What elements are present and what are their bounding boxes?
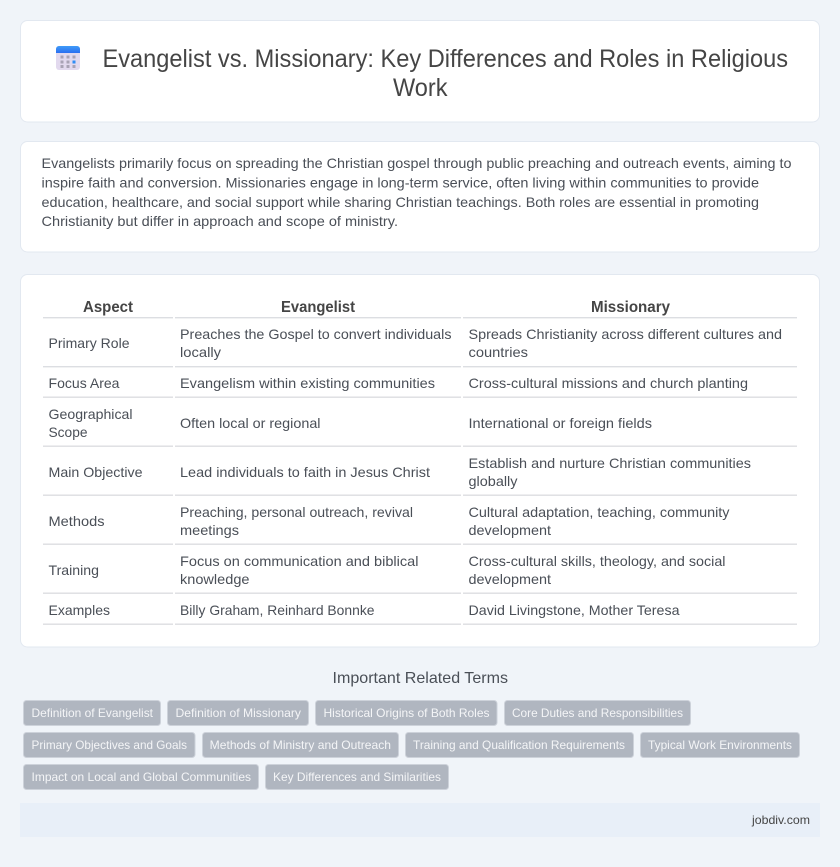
- tag: Typical Work Environments: [648, 738, 792, 752]
- row: methods: Methods: [48, 513, 104, 529]
- tag: Primary Objectives and Goals: [32, 738, 187, 752]
- row: primary role: countries: [468, 344, 528, 360]
- row: training: [48, 553, 726, 587]
- footer: jobdiv.com: [751, 813, 810, 827]
- tag: Definition of Missionary: [176, 706, 301, 720]
- row: main objective: Establish and nurture Christian communities: [468, 455, 751, 471]
- row: focus area: Evangelism within existing communities: [180, 375, 435, 391]
- heading: important related terms: Important Related Terms: [332, 670, 508, 687]
- tag: Training and Qualification Requirements: [413, 738, 625, 752]
- tag: [24, 700, 160, 726]
- row: geographical scope: International or foreign fields: [468, 415, 652, 431]
- row: geographical scope: Often local or regional: [180, 415, 320, 431]
- tag: [168, 700, 308, 726]
- row: primary role: Spreads Christianity across different cultures and: [468, 326, 782, 342]
- row: primary role: [48, 326, 782, 360]
- row: methods: meetings: [180, 522, 239, 538]
- row: focus area: Focus Area: [48, 375, 120, 391]
- tag: [202, 732, 398, 758]
- row: geographical scope: [48, 406, 652, 440]
- row: training: Focus on communication and biblical: [180, 553, 418, 569]
- row: main objective: Lead individuals to faith in Jesus Christ: [180, 464, 430, 480]
- tag: [24, 732, 195, 758]
- row: primary role: Primary Role: [48, 335, 130, 351]
- intro text: inspire faith and conversion. Missionaries engage in long-term service, often living within communities to provide: [42, 174, 759, 190]
- table header: [83, 299, 670, 316]
- row: training: development: [468, 571, 551, 587]
- tag: Core Duties and Responsibilities: [512, 706, 683, 720]
- row: training: Cross-cultural skills, theology, and social: [468, 553, 726, 569]
- row: training: Training: [48, 562, 99, 578]
- title: [102, 45, 788, 102]
- row: training: knowledge: [180, 571, 250, 587]
- panel: introduction: [20, 142, 820, 252]
- table header: Missionary: [591, 299, 670, 316]
- table header: Aspect: [83, 299, 134, 316]
- row: methods: development: [468, 522, 551, 538]
- row: main objective: Main Objective: [48, 464, 143, 480]
- row: examples: Billy Graham, Reinhard Bonnke: [180, 602, 375, 618]
- intro text: education, healthcare, and social support while sharing Christian teachings. Both roles are essential in promoting: [42, 194, 759, 210]
- row: methods: [48, 504, 730, 538]
- tag: [406, 732, 634, 758]
- row: examples: Examples: [48, 602, 110, 618]
- tag: [504, 700, 690, 726]
- intro text: [42, 155, 792, 229]
- title: Work: [393, 74, 448, 102]
- intro text: Christianity but differ in approach and scope of ministry.: [42, 213, 398, 229]
- tag: Impact on Local and Global Communities: [32, 770, 251, 784]
- icon: calendar: [56, 46, 80, 70]
- row: geographical scope: Scope: [48, 424, 88, 440]
- row: geographical scope: Geographical: [48, 406, 132, 422]
- tag: Historical Origins of Both Roles: [324, 706, 490, 720]
- tag: [266, 764, 448, 790]
- row: methods: Preaching, personal outreach, revival: [180, 504, 413, 520]
- row: main objective: globally: [468, 473, 518, 489]
- row: primary role: Preaches the Gospel to convert individuals: [180, 326, 452, 342]
- row: focus area: Cross-cultural missions and church planting: [468, 375, 748, 391]
- tag: [640, 732, 800, 758]
- row: focus area: [48, 375, 748, 391]
- panel: title header: [20, 20, 820, 122]
- row: primary role: locally: [180, 344, 221, 360]
- tag: Definition of Evangelist: [32, 706, 154, 720]
- row: examples: [48, 602, 680, 618]
- tag: [24, 764, 258, 790]
- footer: [20, 803, 820, 837]
- row: main objective: [48, 455, 751, 489]
- title: Evangelist vs. Missionary: Key Differences and Roles in Religious: [102, 45, 788, 73]
- intro text: Evangelists primarily focus on spreading the Christian gospel through public preaching and outreach events, aiming to: [42, 155, 792, 171]
- table header: Evangelist: [281, 299, 356, 316]
- panel: comparison table: [20, 274, 820, 647]
- tag: [316, 700, 497, 726]
- tag: Key Differences and Similarities: [273, 770, 441, 784]
- tag: Methods of Ministry and Outreach: [210, 738, 391, 752]
- row: examples: David Livingstone, Mother Teresa: [468, 602, 680, 618]
- related term tags: [24, 700, 800, 790]
- row: methods: Cultural adaptation, teaching, community: [468, 504, 730, 520]
